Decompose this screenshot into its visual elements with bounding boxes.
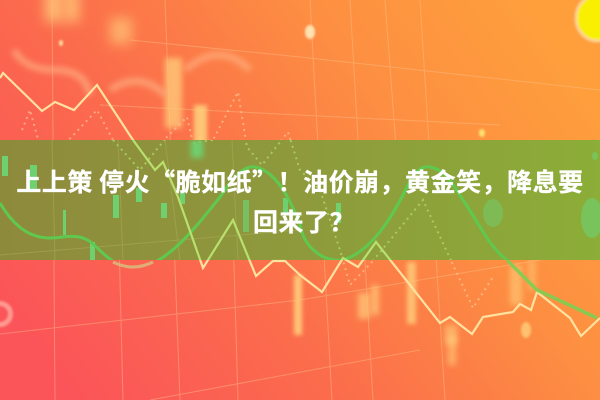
title text: 回来了？ — [253, 203, 355, 239]
blurred candlesticks — [14, 0, 536, 365]
icon: yellow circle top right — [576, 0, 600, 41]
title text: 上上策 停火“脆如纸”！油价崩，黄金笑，降息要 — [16, 163, 584, 199]
title text — [16, 163, 584, 239]
dotted line in band — [112, 140, 452, 260]
band detail: chart in green — [0, 140, 600, 260]
green candlesticks — [2, 140, 600, 262]
green band — [0, 140, 600, 260]
icon: pink ring left edge — [0, 304, 10, 324]
green curve — [0, 167, 507, 268]
grid lines in band — [0, 140, 300, 260]
tan arc below band — [113, 262, 153, 267]
price line in band — [132, 140, 392, 260]
dotted line — [22, 92, 493, 308]
green curve below band — [507, 260, 597, 318]
price line (cream) — [0, 73, 600, 336]
